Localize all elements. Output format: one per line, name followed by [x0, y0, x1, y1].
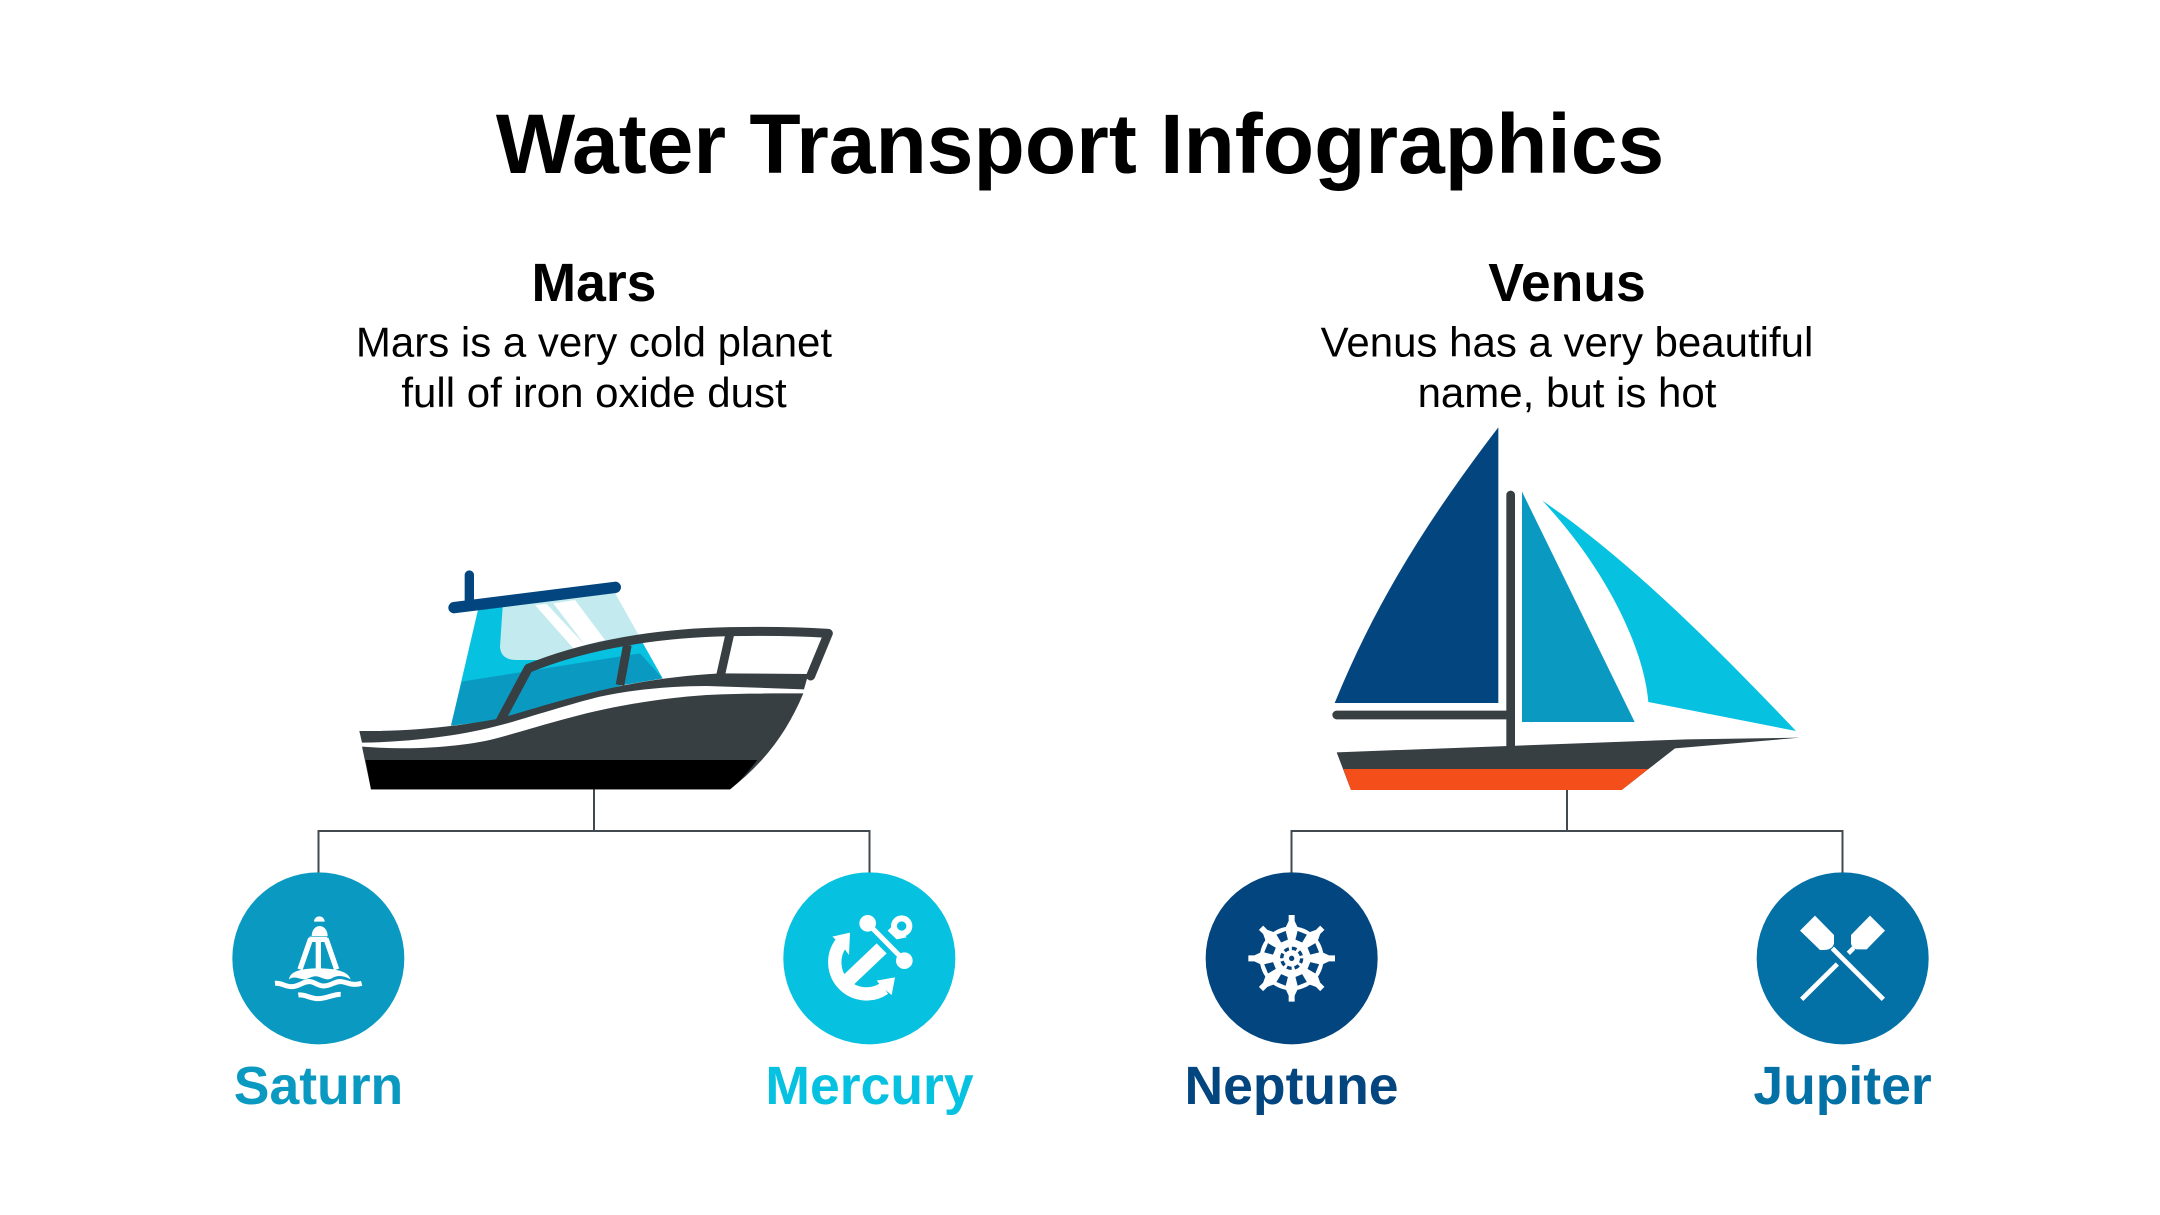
heading: Mars: Mars: [532, 254, 656, 313]
label: Neptune: Neptune: [1184, 1057, 1398, 1116]
text block: Venus: [1321, 254, 1813, 416]
illustration: motor boat: [359, 575, 828, 789]
label: Saturn: Saturn: [234, 1057, 403, 1116]
connector: Venus tree: [1292, 789, 1842, 873]
node: Saturn: [232, 872, 404, 1116]
icon: anchor: [783, 872, 955, 1044]
description: Mars: Mars is a very cold planet: [356, 318, 832, 366]
title: Water Transport Infographics: [496, 97, 1664, 191]
description: Mars: full of iron oxide dust: [401, 369, 787, 416]
icon: buoy: [232, 872, 404, 1044]
text block: Mars: [356, 254, 832, 416]
icon: ship wheel: [1206, 872, 1378, 1044]
illustration: sailboat: [1335, 427, 1800, 790]
description: Venus: Venus has a very beautiful: [1321, 318, 1813, 366]
label: Mercury: Mercury: [765, 1057, 974, 1116]
node: Jupiter: [1753, 872, 1932, 1116]
node: Neptune: [1184, 872, 1398, 1116]
icon: crossed oars: [1757, 872, 1929, 1044]
label: Jupiter: Jupiter: [1753, 1057, 1932, 1116]
description: Venus: name, but is hot: [1418, 369, 1717, 416]
node: Mercury: [765, 872, 974, 1116]
heading: Venus: Venus: [1488, 254, 1646, 313]
connector: Mars tree: [318, 789, 870, 873]
